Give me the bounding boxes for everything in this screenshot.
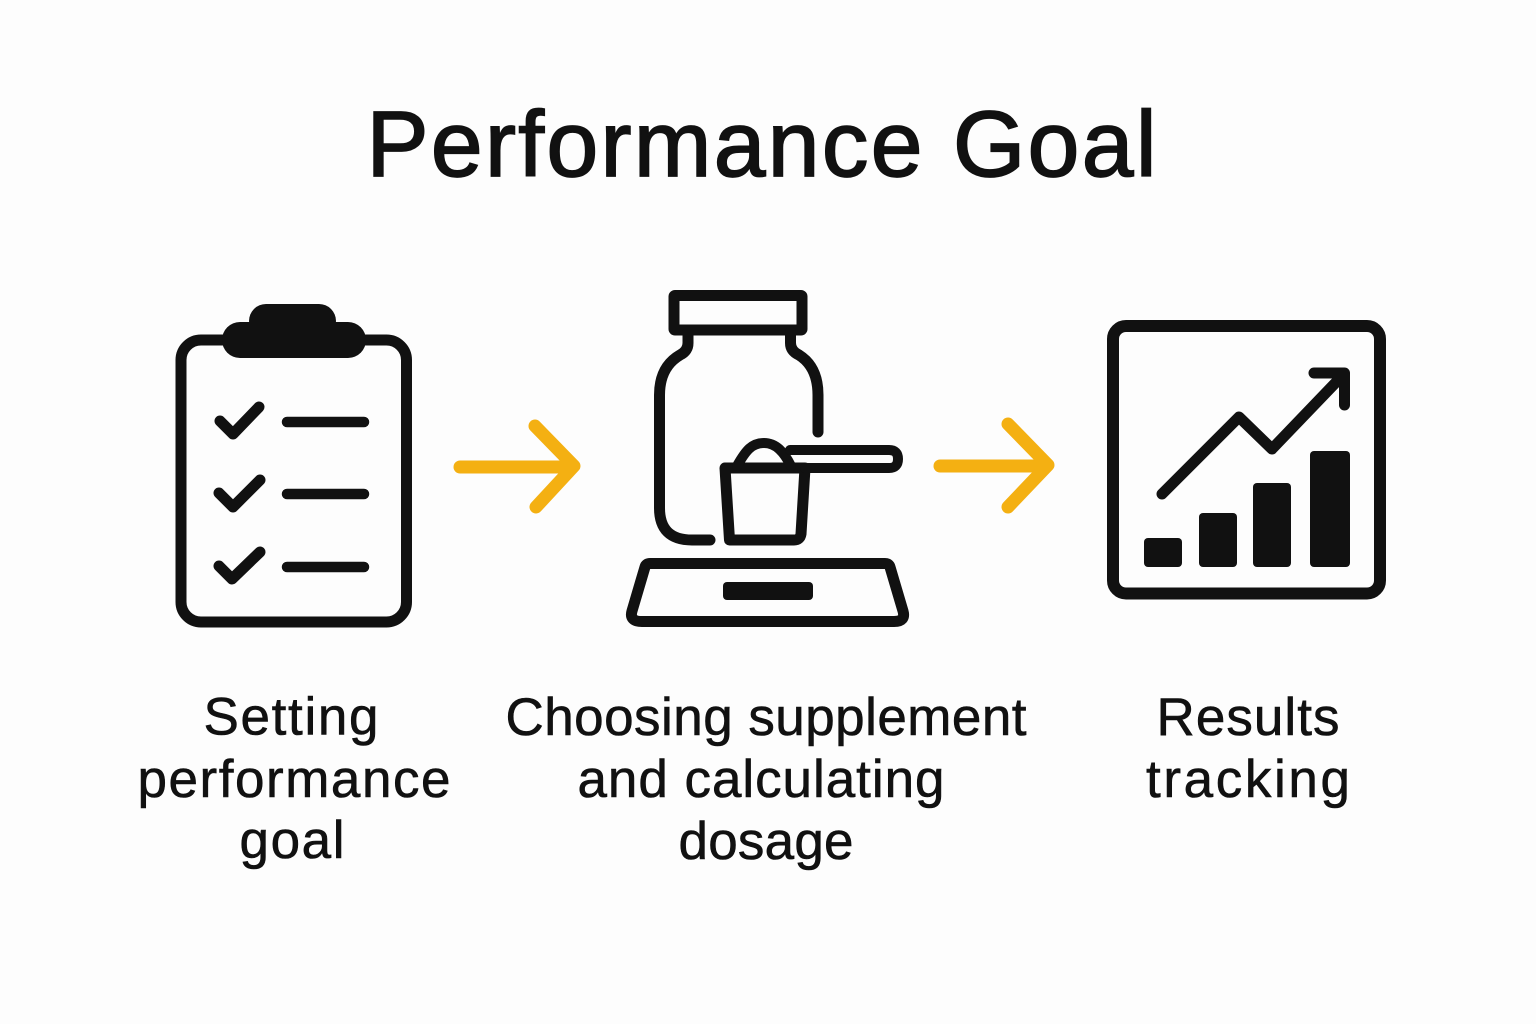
bar four [1310, 451, 1350, 567]
bar three [1253, 483, 1291, 567]
arrow: step one to step two [460, 426, 574, 507]
label: results tracking: tracking [1146, 750, 1350, 809]
title: Performance Goal [366, 92, 1156, 196]
icon: supplement jar, scoop and scale [631, 296, 904, 622]
label: choosing supplement and calculating dosage: and calculating [578, 750, 944, 809]
label: results tracking [1146, 688, 1350, 809]
label: setting performance goal [138, 688, 450, 870]
bar two [1199, 513, 1237, 567]
arrow: step two to step three [940, 424, 1048, 507]
label: choosing supplement and calculating dosage: dosage [678, 812, 854, 871]
icon: results chart [1113, 326, 1380, 594]
label: choosing supplement and calculating dosage: Choosing supplement [506, 688, 1027, 747]
icon: clipboard checklist [181, 304, 406, 622]
label: choosing supplement and calculating dosage [506, 688, 1027, 871]
label: setting performance goal: performance [138, 750, 450, 809]
label: setting performance goal: goal [240, 811, 344, 870]
trend arrow [1162, 373, 1344, 494]
label: setting performance goal: Setting [204, 688, 378, 746]
label: results tracking: Results [1156, 688, 1340, 747]
bar one [1144, 538, 1182, 567]
